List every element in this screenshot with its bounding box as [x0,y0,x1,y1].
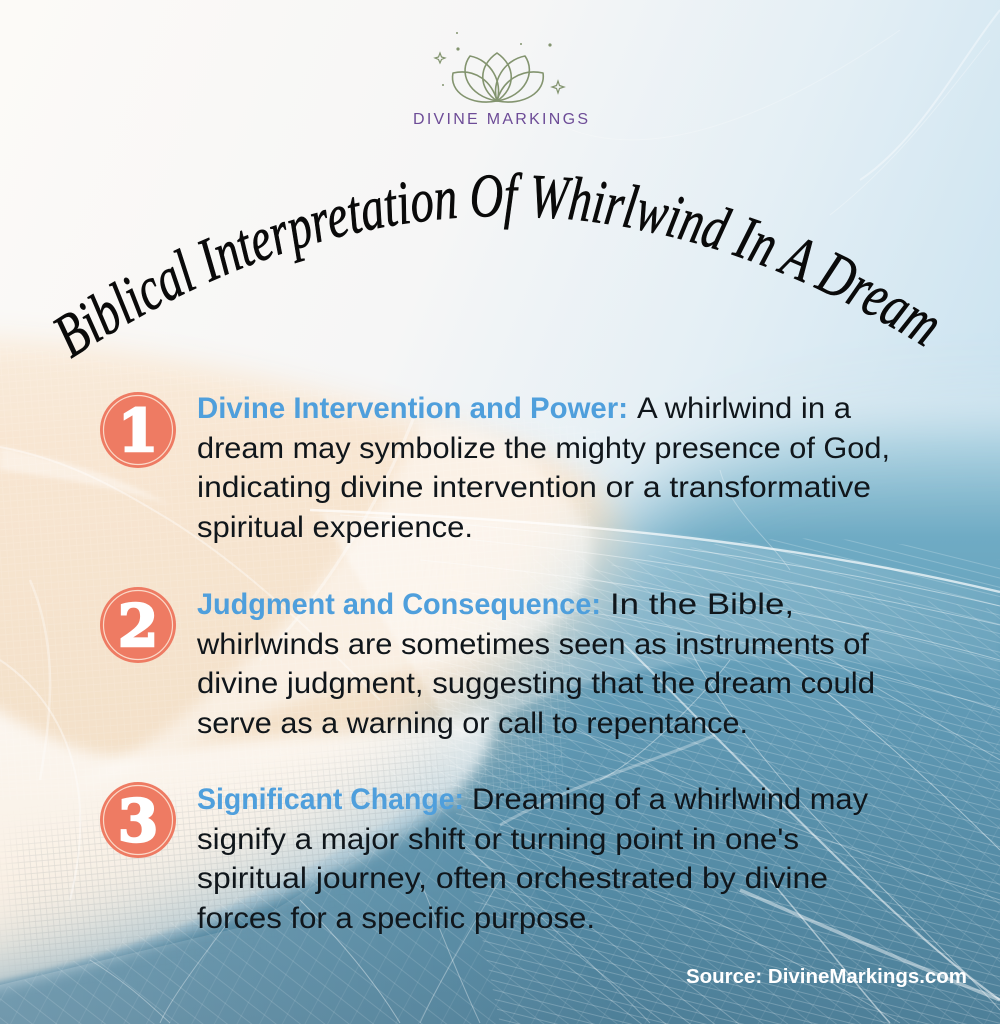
text: point 1: Divine Intervention and Power: [197,392,628,425]
text: point 1 [197,392,890,544]
text: point 1: dream may symbolize the mighty presence of God, [197,432,890,465]
title: curved heading: Biblical Interpretation Of Whirlwind In A Dream [52,172,938,359]
point 3: significant change [100,782,868,935]
text: point 2: whirlwinds are sometimes seen as instruments of [196,628,870,661]
text: point 3: forces for a specific purpose. [197,902,595,935]
source credit: Source: DivineMarkings.com [686,966,967,988]
text: point 1: indicating divine intervention or a transformative [197,471,871,504]
text: point 2: serve as a warning or call to repentance. [197,707,748,740]
text: point 1: spiritual experience. [197,511,473,544]
badge: number 2 [100,587,176,663]
text: point 2 [196,588,875,740]
badge: number 3: 3 [118,787,158,855]
point 2: judgment and consequence [100,587,875,740]
logo wordmark: DIVINE MARKINGS [413,111,588,128]
badge: number 1 [100,392,176,468]
text: point 3: Significant Change: [197,783,464,816]
badge: number 3 [100,782,176,858]
text: point 3: Dreaming of a whirlwind may [472,783,868,816]
icon: sparkle stars [435,53,564,93]
text: point 3: spiritual journey, often orchestrated by divine [197,862,828,895]
mesh: fine line fans over the sea [420,539,1000,1024]
text: point 1: A whirlwind in a [637,392,851,425]
text: point 3: signify a major shift or turning point in one's [197,823,799,856]
logo: Divine Markings lotus and wordmark [413,32,588,128]
text: point 2: In the Bible, [610,588,794,621]
veil: soft bands over sand [70,425,592,790]
text: point 2: Judgment and Consequence: [197,588,601,621]
icon: lotus flower [453,53,543,102]
point 1: divine intervention [100,392,890,544]
icon: dots [442,32,552,86]
text: point 2: divine judgment, suggesting that the dream could [197,667,875,700]
badge: number 2: 2 [118,592,158,660]
badge: number 1: 1 [118,397,158,465]
text: point 3 [197,783,868,935]
